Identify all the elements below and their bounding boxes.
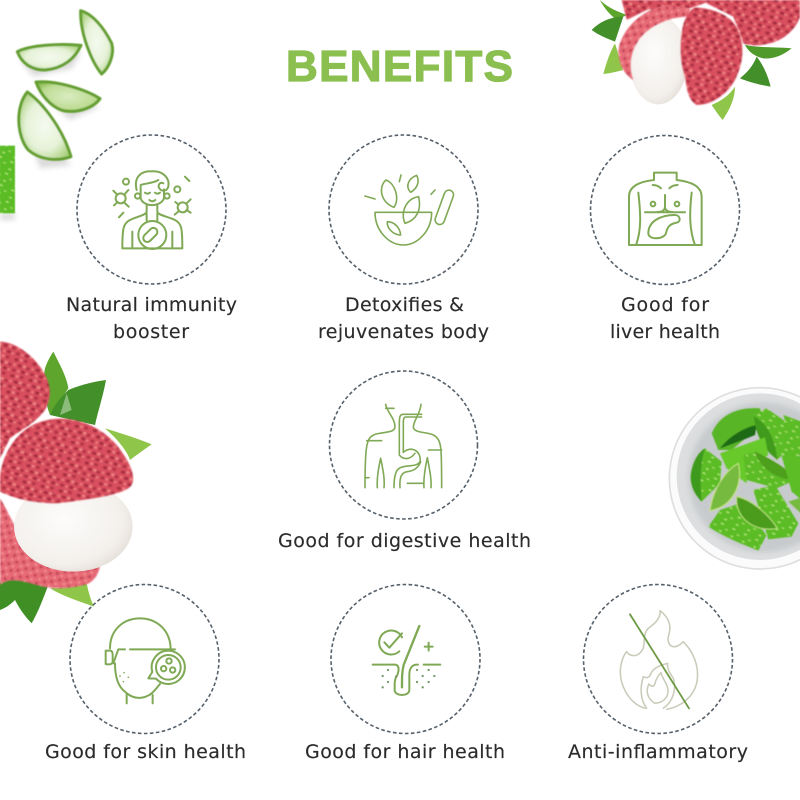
label: Good for <box>621 294 709 316</box>
label <box>610 294 720 343</box>
panel: good for skin health <box>45 584 246 763</box>
title: BENEFITS <box>286 42 513 91</box>
label: booster <box>113 321 189 343</box>
dashed circle <box>584 584 732 734</box>
photo: lychee middle left <box>0 342 152 623</box>
photo: bowl of aloe <box>669 388 800 569</box>
label <box>318 294 489 343</box>
label: Anti-inflammatory <box>568 741 748 763</box>
panel: detoxifies and rejuvenates body <box>318 135 489 343</box>
label: rejuvenates body <box>318 321 489 343</box>
label: Good for skin health <box>45 741 246 763</box>
label <box>66 294 237 343</box>
label: Good for hair health <box>305 741 505 763</box>
dashed circle <box>590 136 740 284</box>
dashed circle <box>331 584 480 734</box>
panel: good for digestive health <box>278 371 531 552</box>
icon: person with pill and viruses <box>113 171 191 249</box>
label: Detoxifies & <box>345 294 464 316</box>
dashed circle <box>330 371 478 519</box>
panel: good for liver health <box>590 136 740 343</box>
panel: natural immunity booster <box>66 135 237 343</box>
icon: herb bowl and pestle <box>365 175 455 245</box>
dashed circle <box>70 584 219 734</box>
photo: lychee top right <box>592 0 800 120</box>
dashed circle <box>77 135 226 284</box>
icon: digestive tract <box>365 404 442 488</box>
photo: aloe slices top left <box>0 11 113 220</box>
icon: crossed out flame <box>620 611 698 709</box>
icon: hair follicle with check <box>373 626 440 695</box>
panel: anti-inflammatory <box>568 584 748 763</box>
dashed circle <box>329 135 478 284</box>
label: Natural immunity <box>66 294 237 316</box>
label: Good for digestive health <box>278 530 531 552</box>
label: liver health <box>610 321 720 343</box>
icon: face with skin magnifier <box>106 618 185 703</box>
icon: torso with liver <box>629 173 702 245</box>
panel: good for hair health <box>305 584 505 763</box>
